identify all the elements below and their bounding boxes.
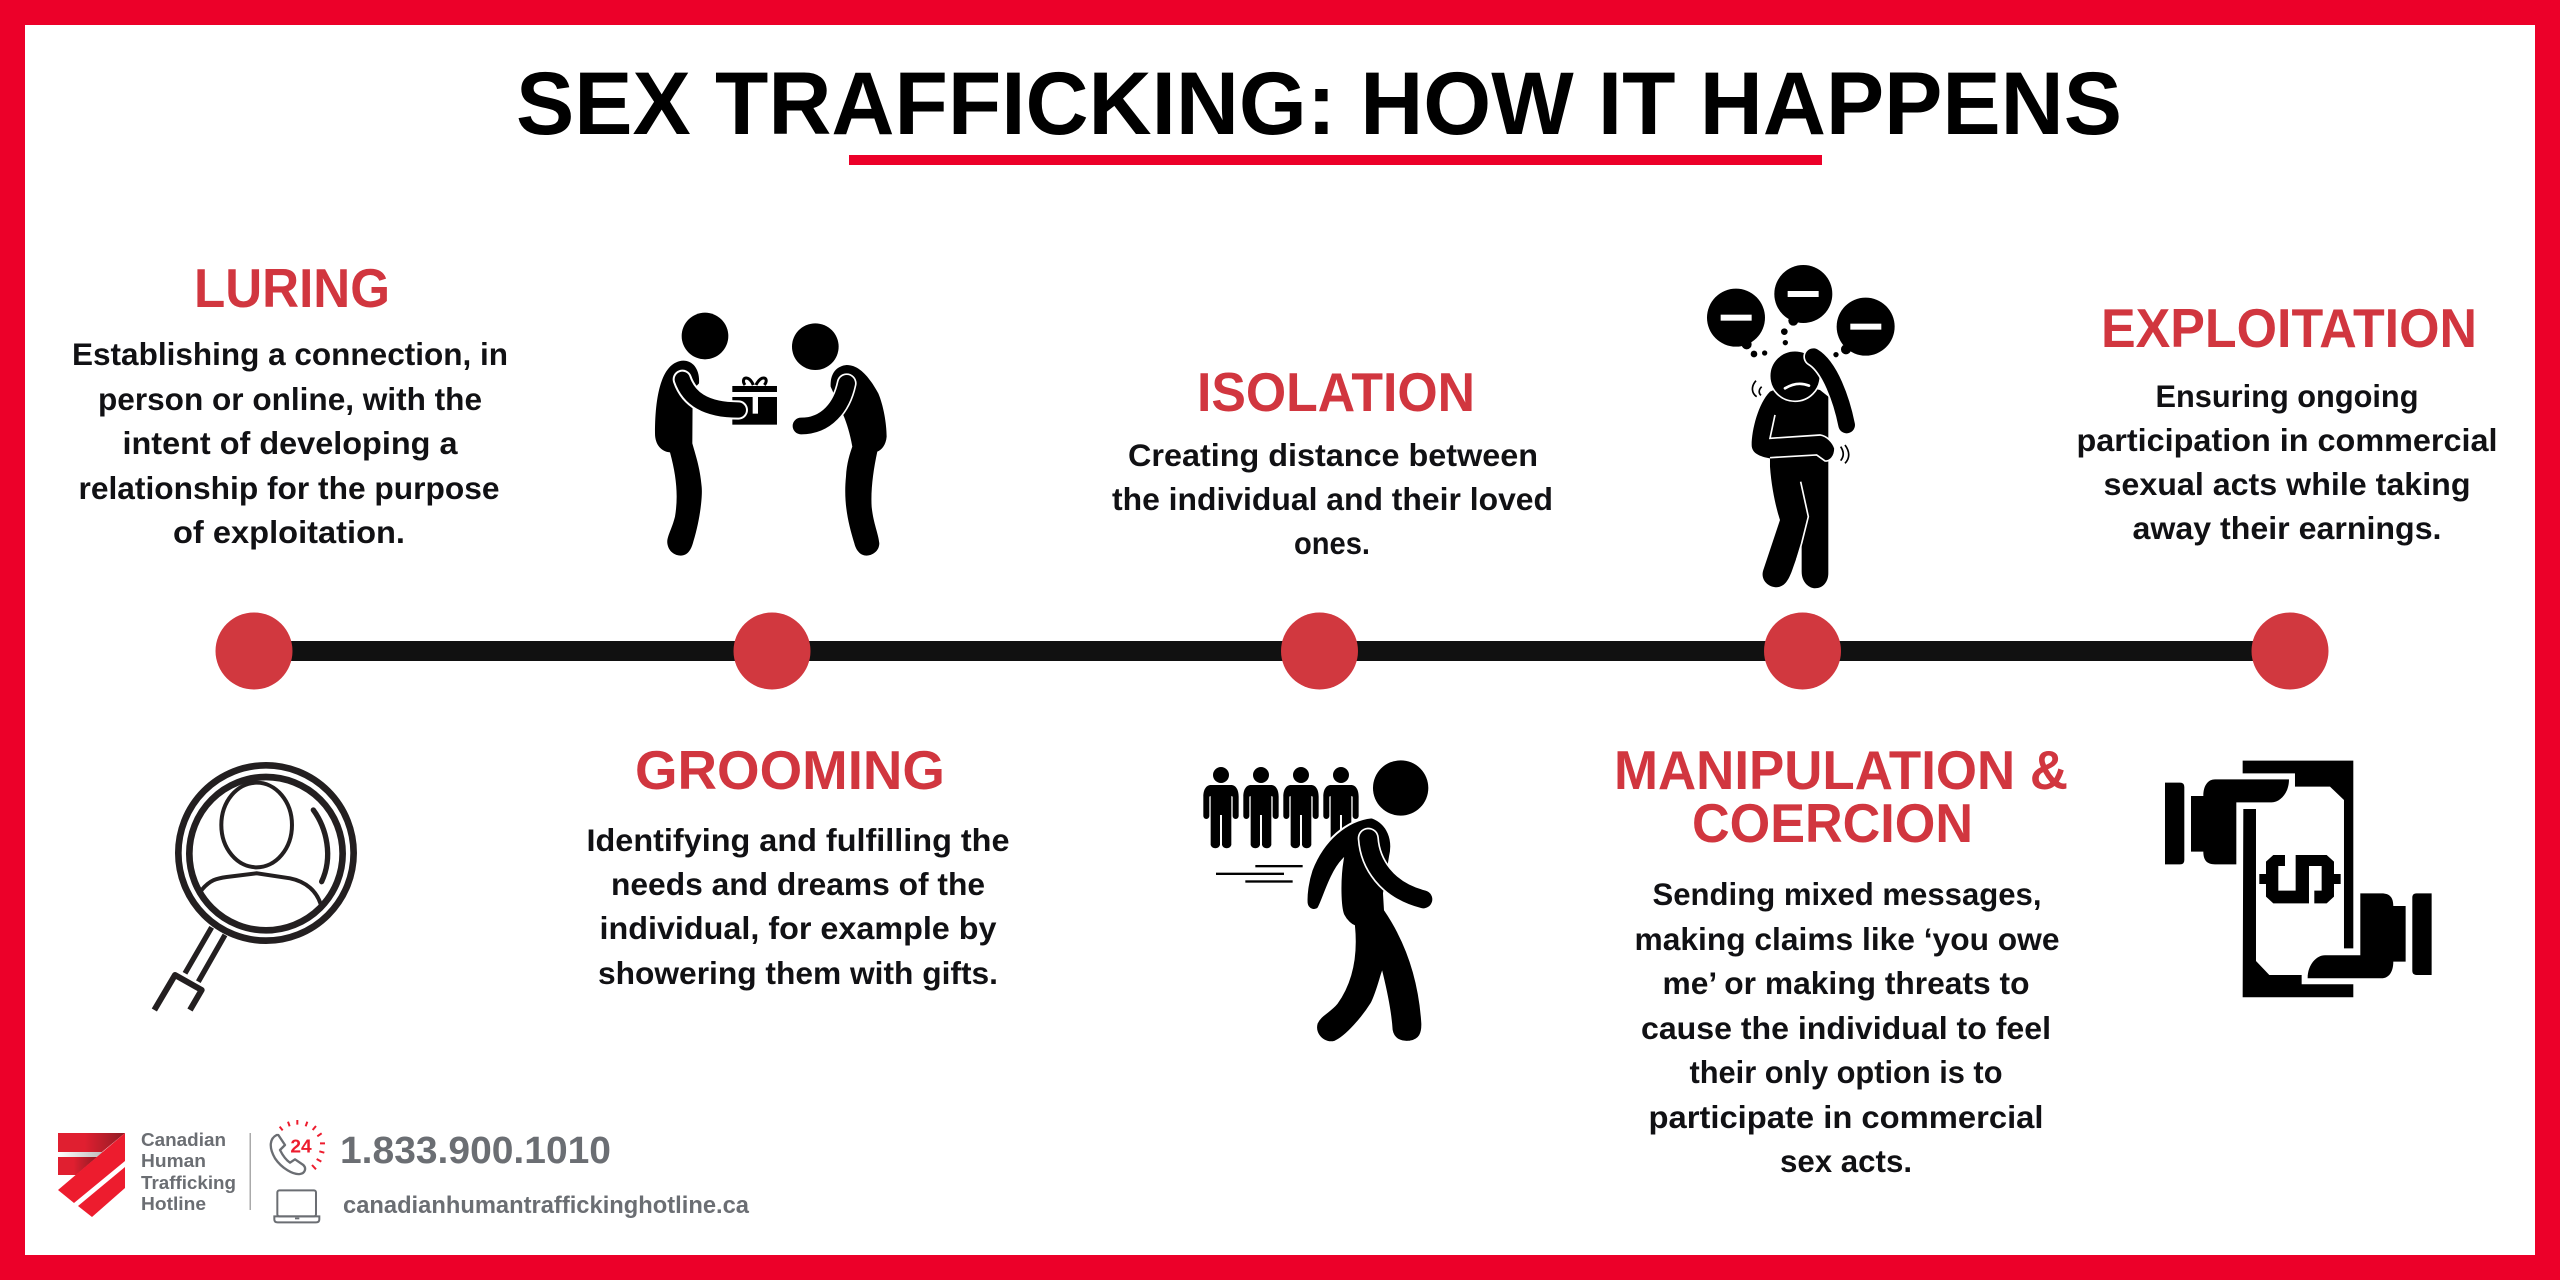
text: website: canadianhumantraffickinghotline.ca [343, 1192, 750, 1219]
text: luring description: Establishing a connection, in [72, 336, 508, 372]
icon: hands exchanging money [2165, 761, 2432, 997]
icon: magnifying glass over person [154, 765, 354, 1010]
text: manipulation description: participate in commercial [1648, 1099, 2044, 1135]
heading: luring: LURING [194, 257, 390, 319]
heading: exploitation: EXPLOITATION [2101, 297, 2477, 359]
text: grooming description: showering them with gifts. [598, 955, 998, 991]
timeline [216, 612, 2328, 690]
text: exploitation description: away their earnings. [2132, 510, 2442, 546]
text: luring description: person or online, with the [98, 381, 482, 417]
icon: person walking away from a group [1203, 760, 1428, 1042]
text: manipulation description: their only option is to [1690, 1054, 2002, 1090]
text: manipulation description: cause the individual to feel [1641, 1010, 2051, 1046]
text: exploitation description: sexual acts while taking [2104, 466, 2470, 502]
icon: anxious person with negative thought bubbles [1707, 265, 1895, 588]
panel: isolation [1112, 361, 1553, 561]
text: manipulation description: sex acts. [1780, 1143, 1912, 1179]
icon: thought bubbles [1707, 265, 1895, 357]
text: isolation description [1112, 437, 1553, 561]
logo wordmark: Human [141, 1150, 206, 1171]
text: exploitation description: participation in commercial [2076, 422, 2498, 458]
text: isolation description: the individual and their loved [1112, 481, 1553, 517]
text: manipulation description: me’ or making threats to [1662, 965, 2030, 1001]
heading: grooming: GROOMING [635, 739, 945, 801]
heading: manipulation and coercion: COERCION [1692, 792, 1973, 854]
text: manipulation description [1634, 876, 2060, 1179]
logo: hotline shield [58, 1133, 125, 1217]
heading: isolation: ISOLATION [1197, 361, 1475, 423]
icon: person giving a gift to another person [655, 313, 887, 556]
text: phone number: 1.833.900.1010 [340, 1130, 611, 1172]
icon: laptop [274, 1190, 319, 1222]
text: luring description: intent of developing a [122, 425, 458, 461]
text: grooming description: Identifying and fulfilling the [586, 822, 1010, 858]
text: isolation description: ones. [1294, 525, 1370, 561]
text: luring description: relationship for the purpose [78, 470, 500, 506]
panel: exploitation [2076, 297, 2498, 546]
logo wordmark [141, 1129, 236, 1214]
logo wordmark: Trafficking [141, 1172, 236, 1193]
panel: grooming [586, 739, 1010, 991]
panel: manipulation and coercion [1614, 739, 2068, 1179]
text: exploitation description: Ensuring ongoing [2156, 378, 2418, 414]
footer: hotline contact block [58, 1120, 750, 1222]
heading: manipulation and coercion [1614, 739, 2068, 854]
icon: 24 hour phone: 24 [290, 1135, 312, 1156]
text: luring description: of exploitation. [173, 514, 405, 550]
text: manipulation description: making claims like ‘you owe [1634, 921, 2060, 957]
text: grooming description: needs and dreams of the [611, 866, 985, 902]
text: isolation description: Creating distance between [1128, 437, 1538, 473]
logo wordmark: Canadian [141, 1129, 226, 1150]
text: grooming description: individual, for example by [600, 910, 997, 946]
title: SEX TRAFFICKING: HOW IT HAPPENS [516, 53, 2122, 153]
text: luring description [72, 336, 508, 550]
panel: luring [72, 257, 508, 550]
text: grooming description [586, 822, 1010, 991]
text: manipulation description: Sending mixed messages, [1652, 876, 2042, 912]
heading: manipulation and coercion: MANIPULATION & [1614, 739, 2068, 801]
text: exploitation description [2076, 378, 2498, 546]
icon: 24 hour phone [271, 1120, 325, 1174]
logo wordmark: Hotline [141, 1193, 206, 1214]
